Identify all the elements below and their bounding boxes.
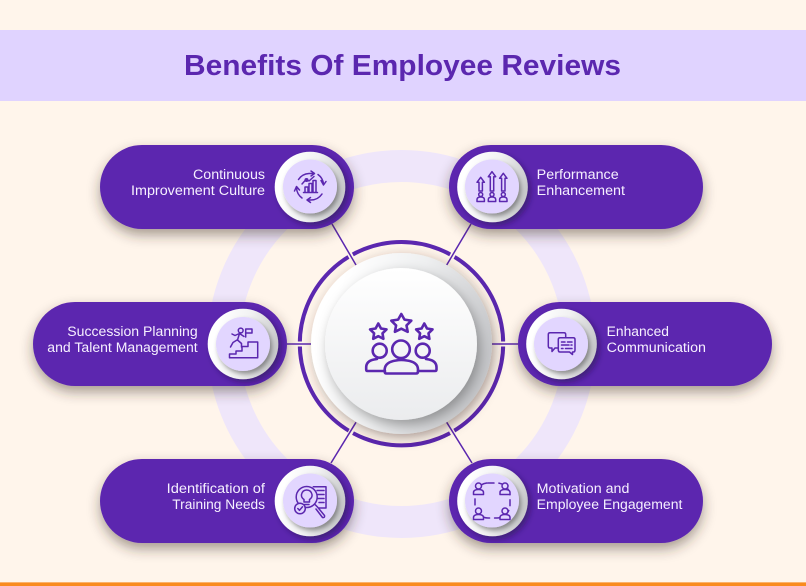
panel: Identification of Training Needs: Identification of xyxy=(167,481,265,496)
panel: Succession Planning and Talent Management: Succession Planning xyxy=(67,324,198,339)
bottom orange bar xyxy=(0,582,806,586)
title: Benefits Of Employee Reviews xyxy=(184,50,621,82)
central disc xyxy=(311,253,492,434)
panel: Continuous Improvement Culture: Continuous xyxy=(193,167,265,182)
central ring with connectors xyxy=(287,224,518,463)
icon: speech bubbles xyxy=(548,333,575,354)
title band xyxy=(0,30,806,101)
panel: Performance Enhancement xyxy=(449,145,703,229)
panel: Continuous Improvement Culture: Improvement Culture xyxy=(131,183,265,198)
panel: Enhanced Communication: Communication xyxy=(607,340,706,355)
panel: Succession Planning and Talent Management: and Talent Management xyxy=(47,340,198,355)
icon: team with stars xyxy=(366,314,436,374)
panel: Motivation and Employee Engagement: Motivation and xyxy=(537,481,629,496)
icon: stairs and flag xyxy=(230,328,258,358)
panel: Enhanced Communication xyxy=(518,302,772,386)
panel: Enhanced Communication: Enhanced xyxy=(607,324,669,339)
icon: arrows over people xyxy=(477,172,507,202)
panel: Motivation and Employee Engagement: Employee Engagement xyxy=(537,497,683,512)
icon: people in a circle xyxy=(474,483,510,520)
panel: Performance Enhancement: Enhancement xyxy=(537,183,625,198)
panel: Motivation and Employee Engagement xyxy=(449,459,703,543)
panel: Succession Planning and Talent Management xyxy=(33,302,287,386)
panel: Identification of Training Needs xyxy=(100,459,354,543)
panel: Performance Enhancement: Performance xyxy=(537,167,619,182)
icon: magnifier, bulb and checklist xyxy=(295,486,326,518)
icon: improvement cycle xyxy=(294,171,326,202)
panel: Continuous Improvement Culture xyxy=(100,145,354,229)
pale background ring xyxy=(224,166,580,522)
panel: Identification of Training Needs: Training Needs xyxy=(172,497,265,512)
